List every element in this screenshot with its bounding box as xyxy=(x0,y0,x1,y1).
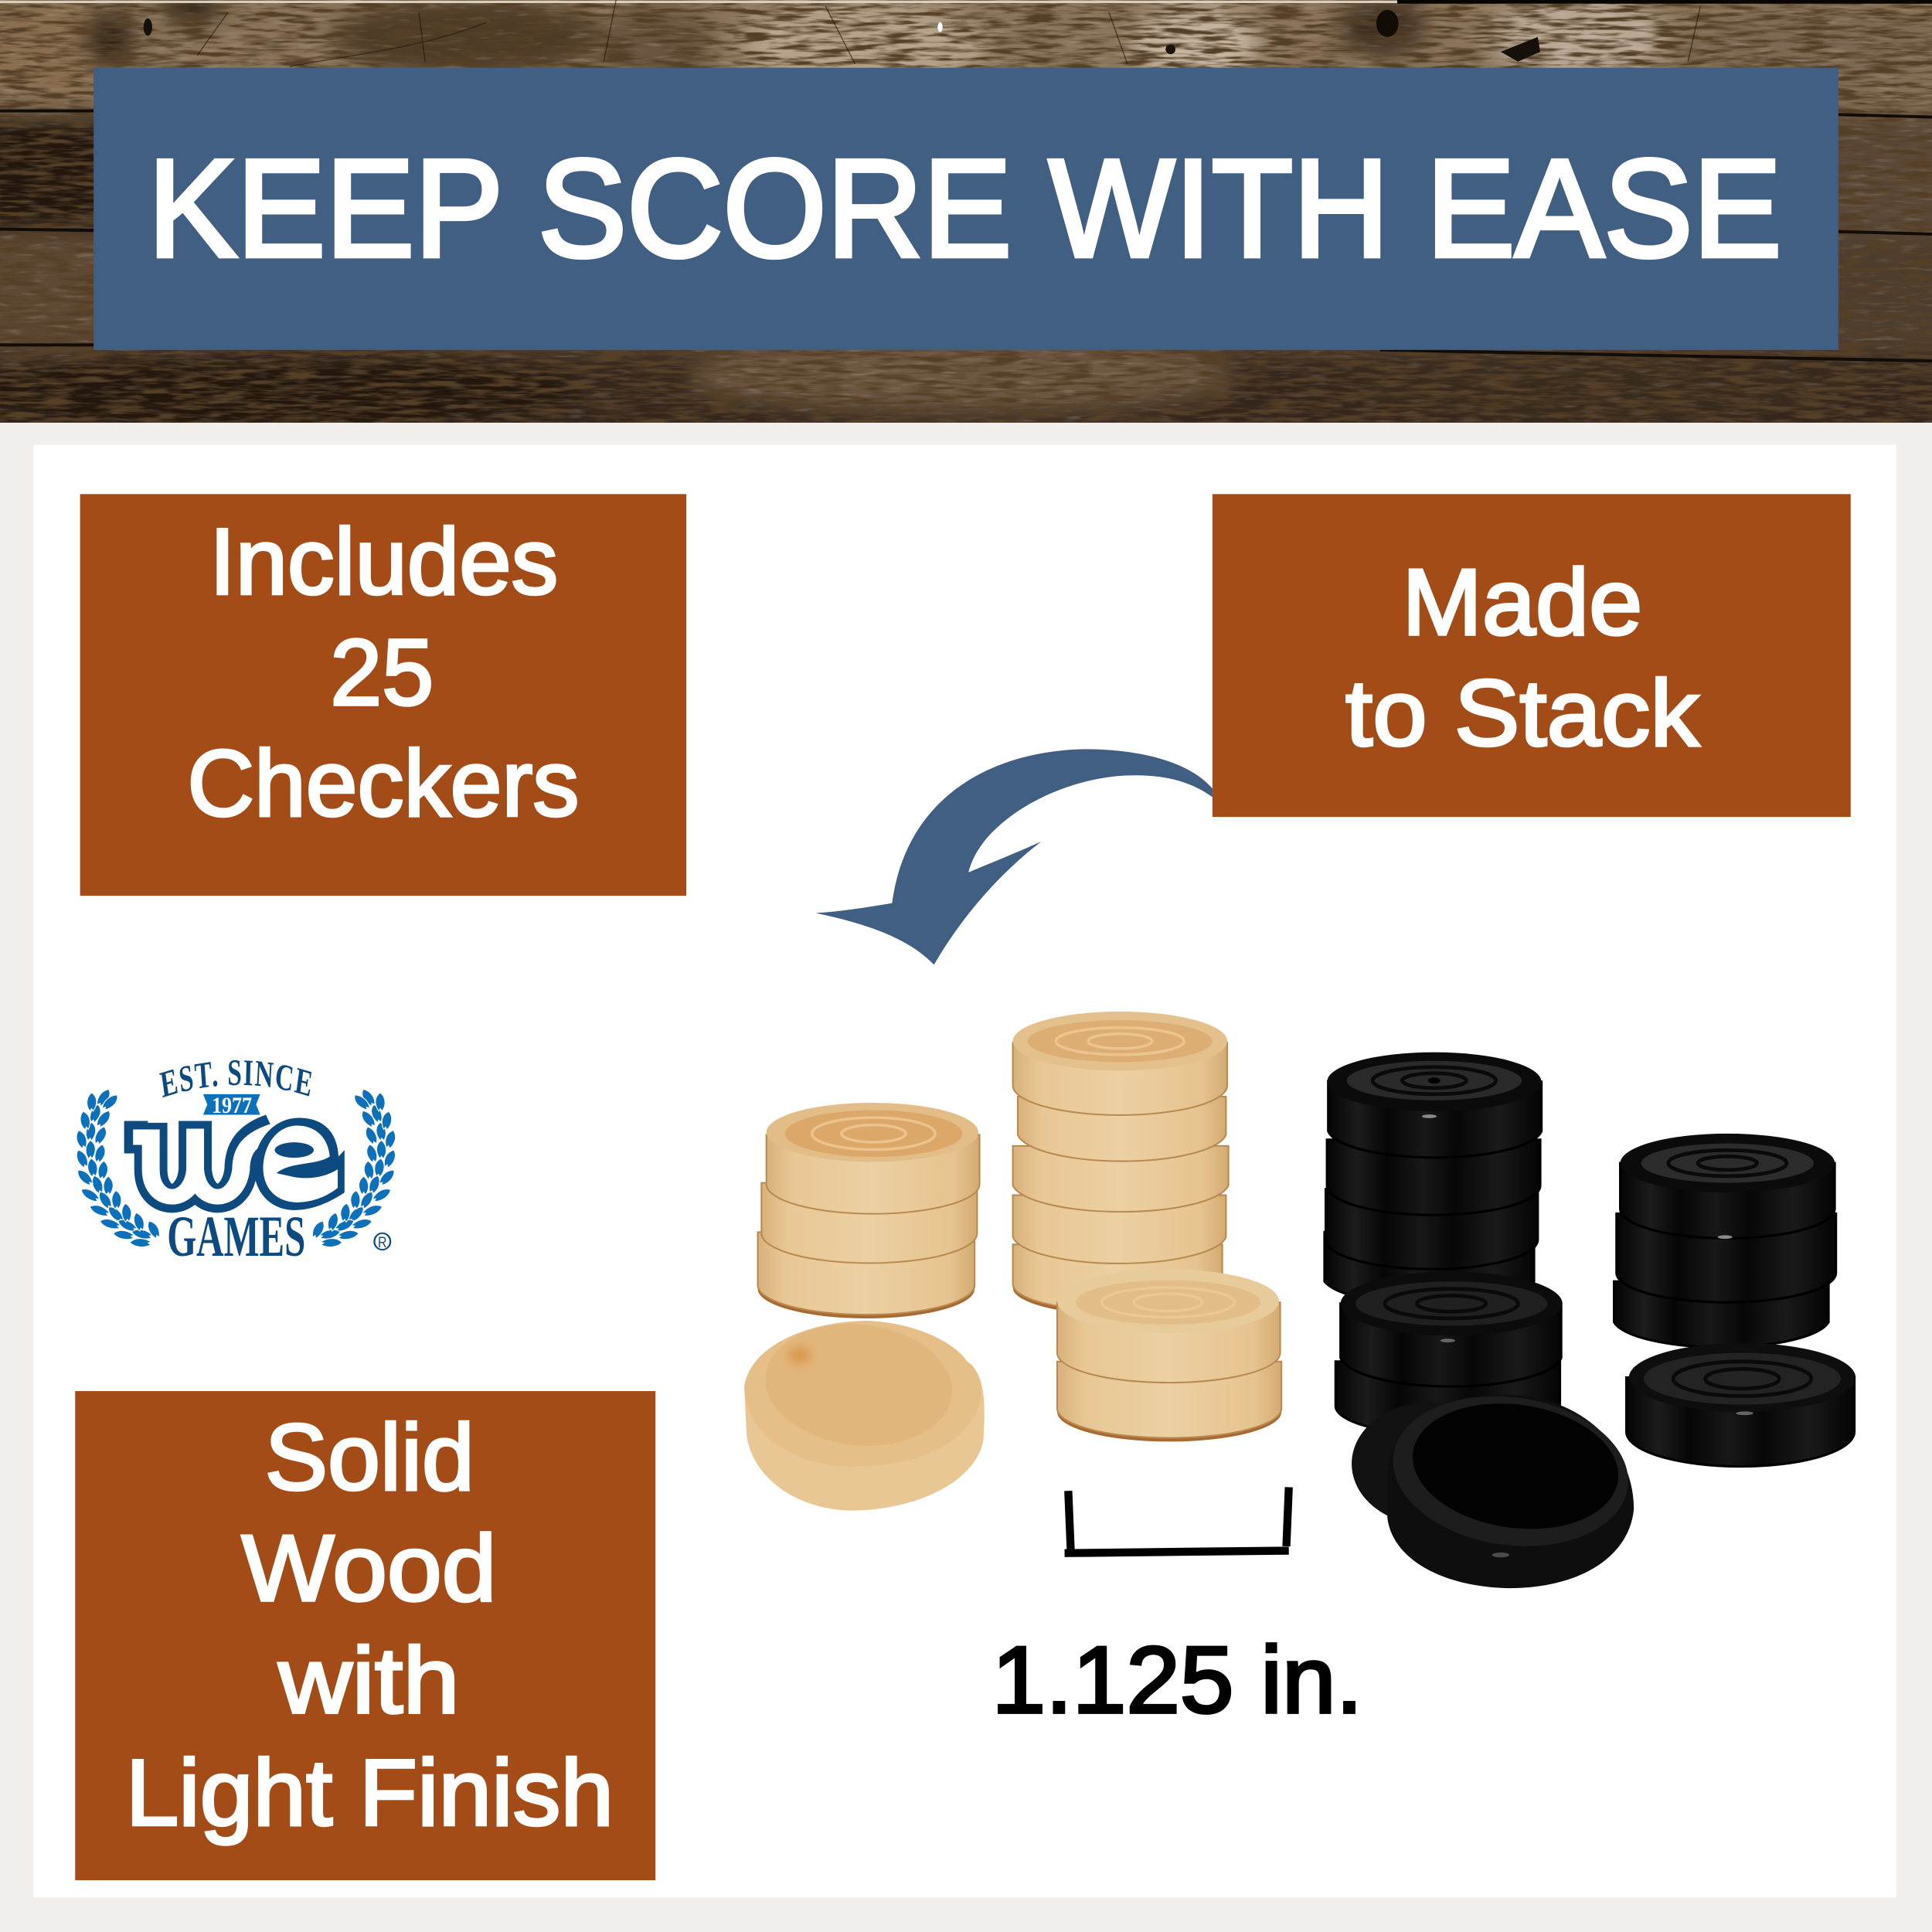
callout: solid wood with light finish: Light Finish xyxy=(126,1740,614,1845)
arrow xyxy=(815,749,1213,964)
registered mark: R xyxy=(378,1234,387,1250)
checker photo xyxy=(744,1012,1855,1588)
callout: solid wood with light finish xyxy=(75,1391,655,1880)
black stack right xyxy=(1614,1134,1836,1347)
title: KEEP SCORE WITH EASE xyxy=(148,131,1781,287)
light stack tall xyxy=(1013,1012,1229,1315)
1977 banner: 1977 xyxy=(212,1092,252,1117)
callout: includes 25 checkers: Includes xyxy=(209,509,558,614)
callout: solid wood with light finish: with xyxy=(277,1628,460,1733)
logo: WE Games xyxy=(77,1060,396,1269)
black checker right single xyxy=(1627,1343,1855,1467)
light checker flipped xyxy=(744,1315,985,1511)
callout: solid wood with light finish: Solid xyxy=(265,1405,474,1510)
black stack left xyxy=(1325,1053,1542,1304)
black stack front xyxy=(1335,1271,1563,1435)
size label: 1.125 in. xyxy=(992,1628,1362,1733)
callout: includes 25 checkers: Checkers xyxy=(187,730,579,835)
callout: includes 25 checkers xyxy=(80,494,686,896)
callout: includes 25 checkers: 25 xyxy=(330,620,434,725)
light stack front xyxy=(1057,1269,1281,1441)
est. since text xyxy=(159,1060,312,1097)
callout: solid wood with light finish: Wood xyxy=(241,1515,497,1621)
callout: made to stack xyxy=(1213,494,1851,817)
black checkers flipped xyxy=(1352,1382,1638,1588)
title banner xyxy=(94,68,1838,350)
wood plank header xyxy=(0,0,1932,451)
callout: made to stack: to Stack xyxy=(1345,661,1699,766)
size bracket xyxy=(1065,1487,1289,1553)
est. since text: EST. SINCE xyxy=(159,1060,312,1097)
light stack left xyxy=(758,1103,980,1318)
games text: GAMES xyxy=(167,1203,305,1269)
we lettering xyxy=(124,1118,345,1210)
laurel wreath xyxy=(73,1087,398,1247)
white content panel xyxy=(33,445,1896,1897)
callout: made to stack: Made xyxy=(1402,549,1642,655)
